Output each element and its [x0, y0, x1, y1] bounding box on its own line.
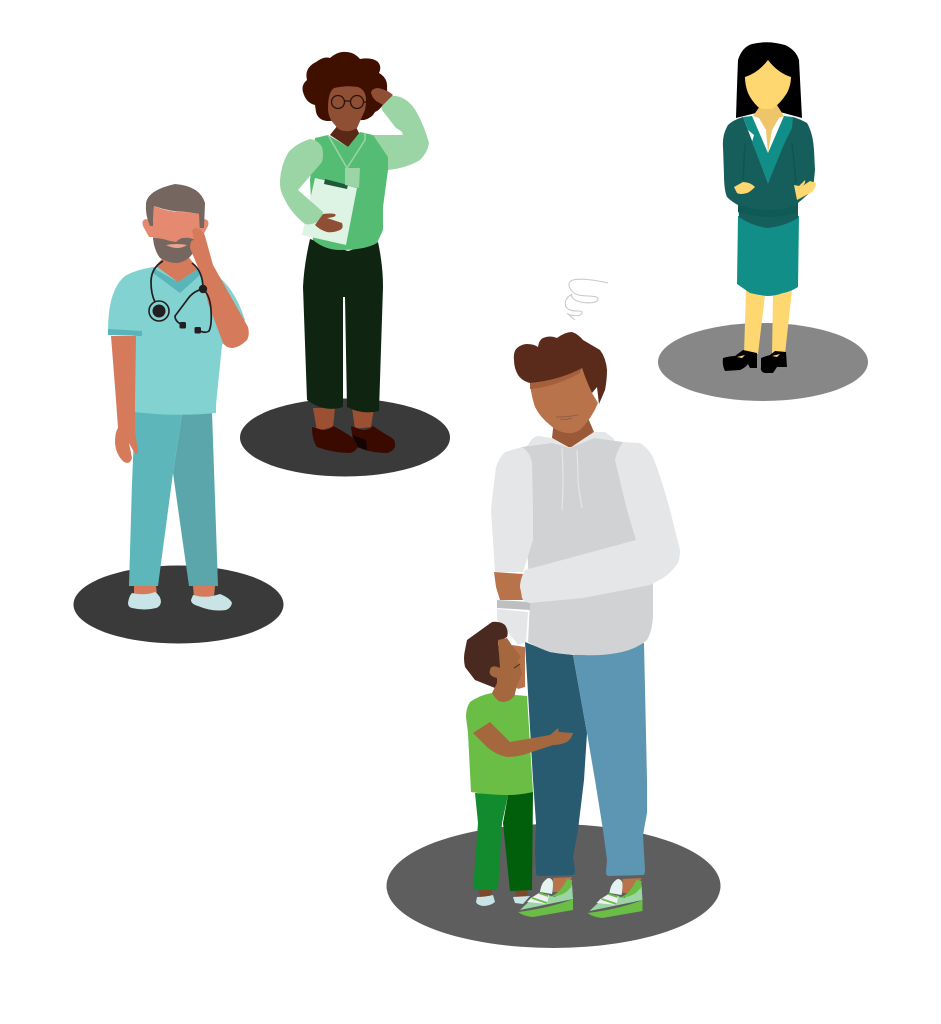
nurse face	[328, 86, 366, 131]
nurse raised arm	[362, 96, 429, 170]
nurse ankles	[313, 408, 374, 431]
woman waistband shading	[738, 205, 798, 217]
doctor ears	[142, 219, 208, 237]
doctor shoes	[128, 592, 232, 610]
nurse clipboard	[302, 178, 357, 245]
nurse lanyard	[328, 133, 365, 168]
father folded arm	[520, 442, 680, 603]
doctor scrub top	[108, 267, 245, 415]
doctor raised arm	[190, 228, 249, 348]
woman face	[745, 60, 791, 109]
child shirt	[466, 693, 533, 795]
doctor trousers	[129, 412, 182, 586]
figure: doctor	[108, 184, 249, 610]
floor ellipse: doctor	[74, 566, 284, 644]
floor ellipse: father and child	[386, 824, 720, 948]
father left shoe	[518, 877, 573, 917]
floor ellipse: businesswoman	[658, 323, 868, 401]
father cuff shadow	[497, 600, 530, 610]
father hair	[514, 332, 607, 404]
figure: nurse	[280, 52, 429, 453]
doctor sleeve trim	[108, 329, 142, 336]
father rear arm	[491, 447, 533, 572]
child face	[490, 638, 522, 708]
nurse glasses	[332, 96, 369, 108]
woman jacket fold lines	[743, 143, 796, 183]
doctor collar	[153, 268, 200, 293]
father dark trouser leg	[525, 642, 587, 876]
father lower sleeve	[497, 609, 528, 645]
doctor left arm	[111, 336, 138, 463]
woman hands	[734, 182, 755, 194]
floor ellipse: nurse	[240, 398, 450, 476]
nurse torso	[310, 132, 388, 250]
woman neck	[753, 105, 784, 153]
doctor ankles	[134, 586, 215, 597]
child ankles	[479, 890, 528, 897]
woman skirt	[737, 216, 799, 296]
father neck	[552, 418, 594, 448]
doctor face	[153, 206, 200, 257]
clipboard clip	[324, 179, 348, 189]
woman shoe straps gap	[737, 354, 780, 358]
stress squiggle	[565, 279, 608, 320]
child shoes	[476, 895, 530, 906]
figure: businesswoman	[723, 42, 816, 373]
nurse lower hand	[315, 214, 343, 232]
nurse hair	[302, 52, 387, 121]
nurse left arm	[280, 139, 323, 224]
woman lapels	[743, 116, 793, 183]
woman legs	[744, 290, 792, 354]
woman jacket	[723, 117, 815, 228]
father wrist and hand	[494, 572, 523, 600]
nurse trousers	[303, 239, 383, 412]
child trousers	[473, 793, 508, 890]
nurse shoe shadow	[352, 435, 367, 450]
figure: father	[491, 279, 680, 876]
father mouth	[556, 415, 578, 419]
father right shoe	[588, 878, 642, 918]
father hair shadow	[530, 367, 582, 389]
figure: child	[464, 622, 573, 906]
father face	[530, 368, 598, 433]
nurse neck	[330, 125, 361, 147]
nurse hand on head	[371, 88, 393, 105]
doctor beard	[153, 238, 195, 263]
child hair	[464, 622, 508, 688]
doctor hair	[146, 184, 205, 228]
father light trouser leg	[573, 643, 647, 876]
hoodie drawstrings	[562, 448, 582, 510]
child arm	[473, 722, 573, 757]
woman hair	[736, 42, 802, 118]
child eye	[514, 664, 520, 668]
woman shoes	[723, 350, 787, 373]
nurse shoes	[312, 426, 395, 453]
father second hand	[510, 645, 525, 689]
father hood	[525, 432, 618, 448]
stethoscope	[149, 261, 211, 334]
nurse badge	[345, 168, 360, 188]
doctor mouth	[166, 244, 187, 248]
father hoodie body	[522, 438, 653, 655]
doctor neck	[156, 255, 198, 282]
woman shirt	[753, 116, 784, 153]
